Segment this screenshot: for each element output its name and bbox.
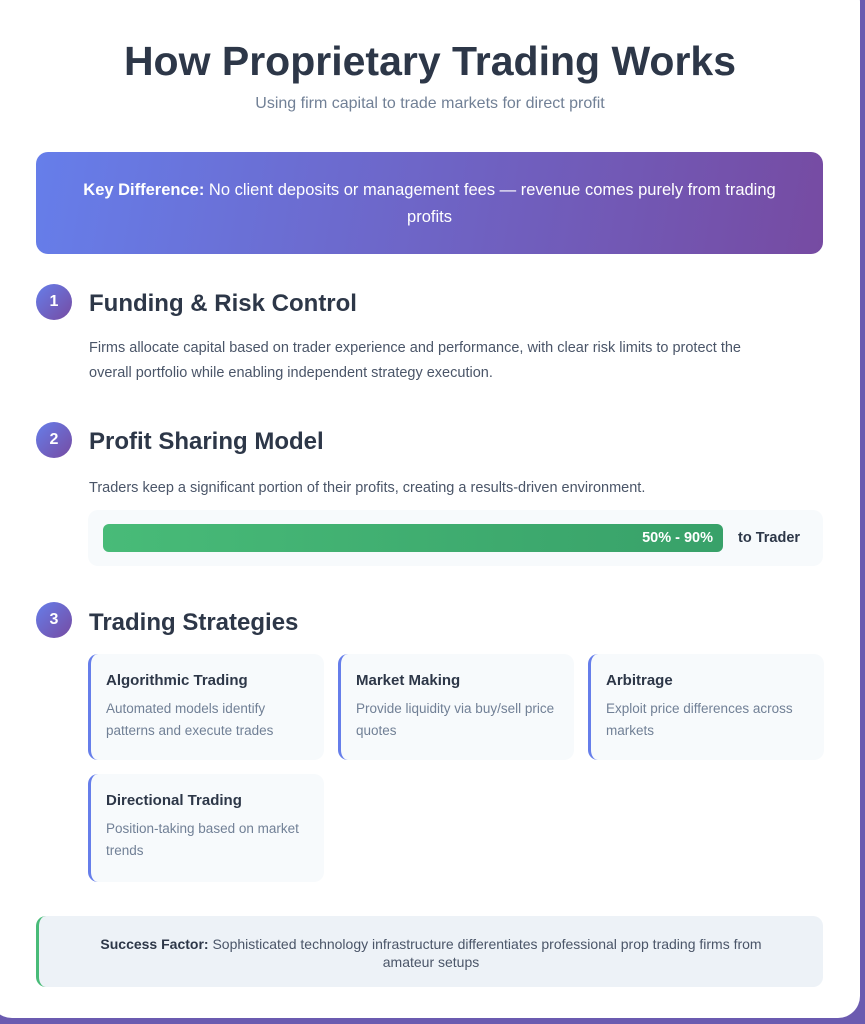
- card: algorithmic: patterns and execute trades: [106, 723, 273, 738]
- icon: step 2: 2: [50, 431, 58, 448]
- card: directional: Position-taking based on market: [106, 821, 299, 836]
- text: profit sharing: Traders keep a significant portion of their profits, creating a results-driven environment.: [89, 480, 645, 496]
- text: funding: [89, 340, 741, 381]
- text: funding: Firms allocate capital based on trader experience and performance, with clear risk limits to protect the: [89, 340, 741, 356]
- callout: success factor: amateur setups: [383, 954, 479, 970]
- callout: success factor: [36, 916, 823, 987]
- icon: step 3: 3: [50, 611, 58, 628]
- card: market making: Provide liquidity via buy/sell price: [356, 701, 554, 716]
- callout: key difference: [36, 152, 823, 254]
- card: directional: Directional Trading: [106, 792, 242, 809]
- icon: step 1: 1: [50, 293, 58, 310]
- label: to trader: to Trader: [738, 530, 800, 546]
- card: market making: quotes: [356, 723, 397, 738]
- card: arbitrage: markets: [606, 723, 654, 738]
- card: directional: [88, 774, 324, 882]
- icon: step 3: [36, 602, 72, 638]
- card: market making: [338, 654, 574, 760]
- heading: funding: Funding & Risk Control: [89, 290, 357, 317]
- card: algorithmic: Algorithmic Trading: [106, 672, 248, 689]
- card: algorithmic: [88, 654, 324, 760]
- bar chart: profit share: [88, 510, 823, 566]
- bar: 50-90%: [103, 524, 723, 552]
- heading: profit sharing: Profit Sharing Model: [89, 428, 324, 455]
- subtitle: Using firm capital to trade markets for direct profit: [255, 95, 605, 112]
- card: arbitrage: [588, 654, 824, 760]
- title: How Proprietary Trading Works: [124, 38, 736, 84]
- icon: step 1: [36, 284, 72, 320]
- card: directional: trends: [106, 843, 144, 858]
- bar: 50-90%: 50% - 90%: [642, 530, 713, 546]
- card: market making: Market Making: [356, 672, 460, 689]
- callout: key difference: Key Difference: No client deposits or management fees — revenue comes purely from trading profits: [83, 181, 776, 226]
- card: algorithmic: Automated models identify: [106, 701, 265, 716]
- text: funding: overall portfolio while enabling independent strategy execution.: [89, 365, 493, 381]
- card: arbitrage: Arbitrage: [606, 672, 673, 689]
- heading: strategies: Trading Strategies: [89, 609, 298, 636]
- icon: step 2: [36, 422, 72, 458]
- callout: success factor: Success Factor: Sophisticated technology infrastructure differentiates professional prop trading firms from: [100, 936, 762, 952]
- card: arbitrage: Exploit price differences across: [606, 701, 793, 716]
